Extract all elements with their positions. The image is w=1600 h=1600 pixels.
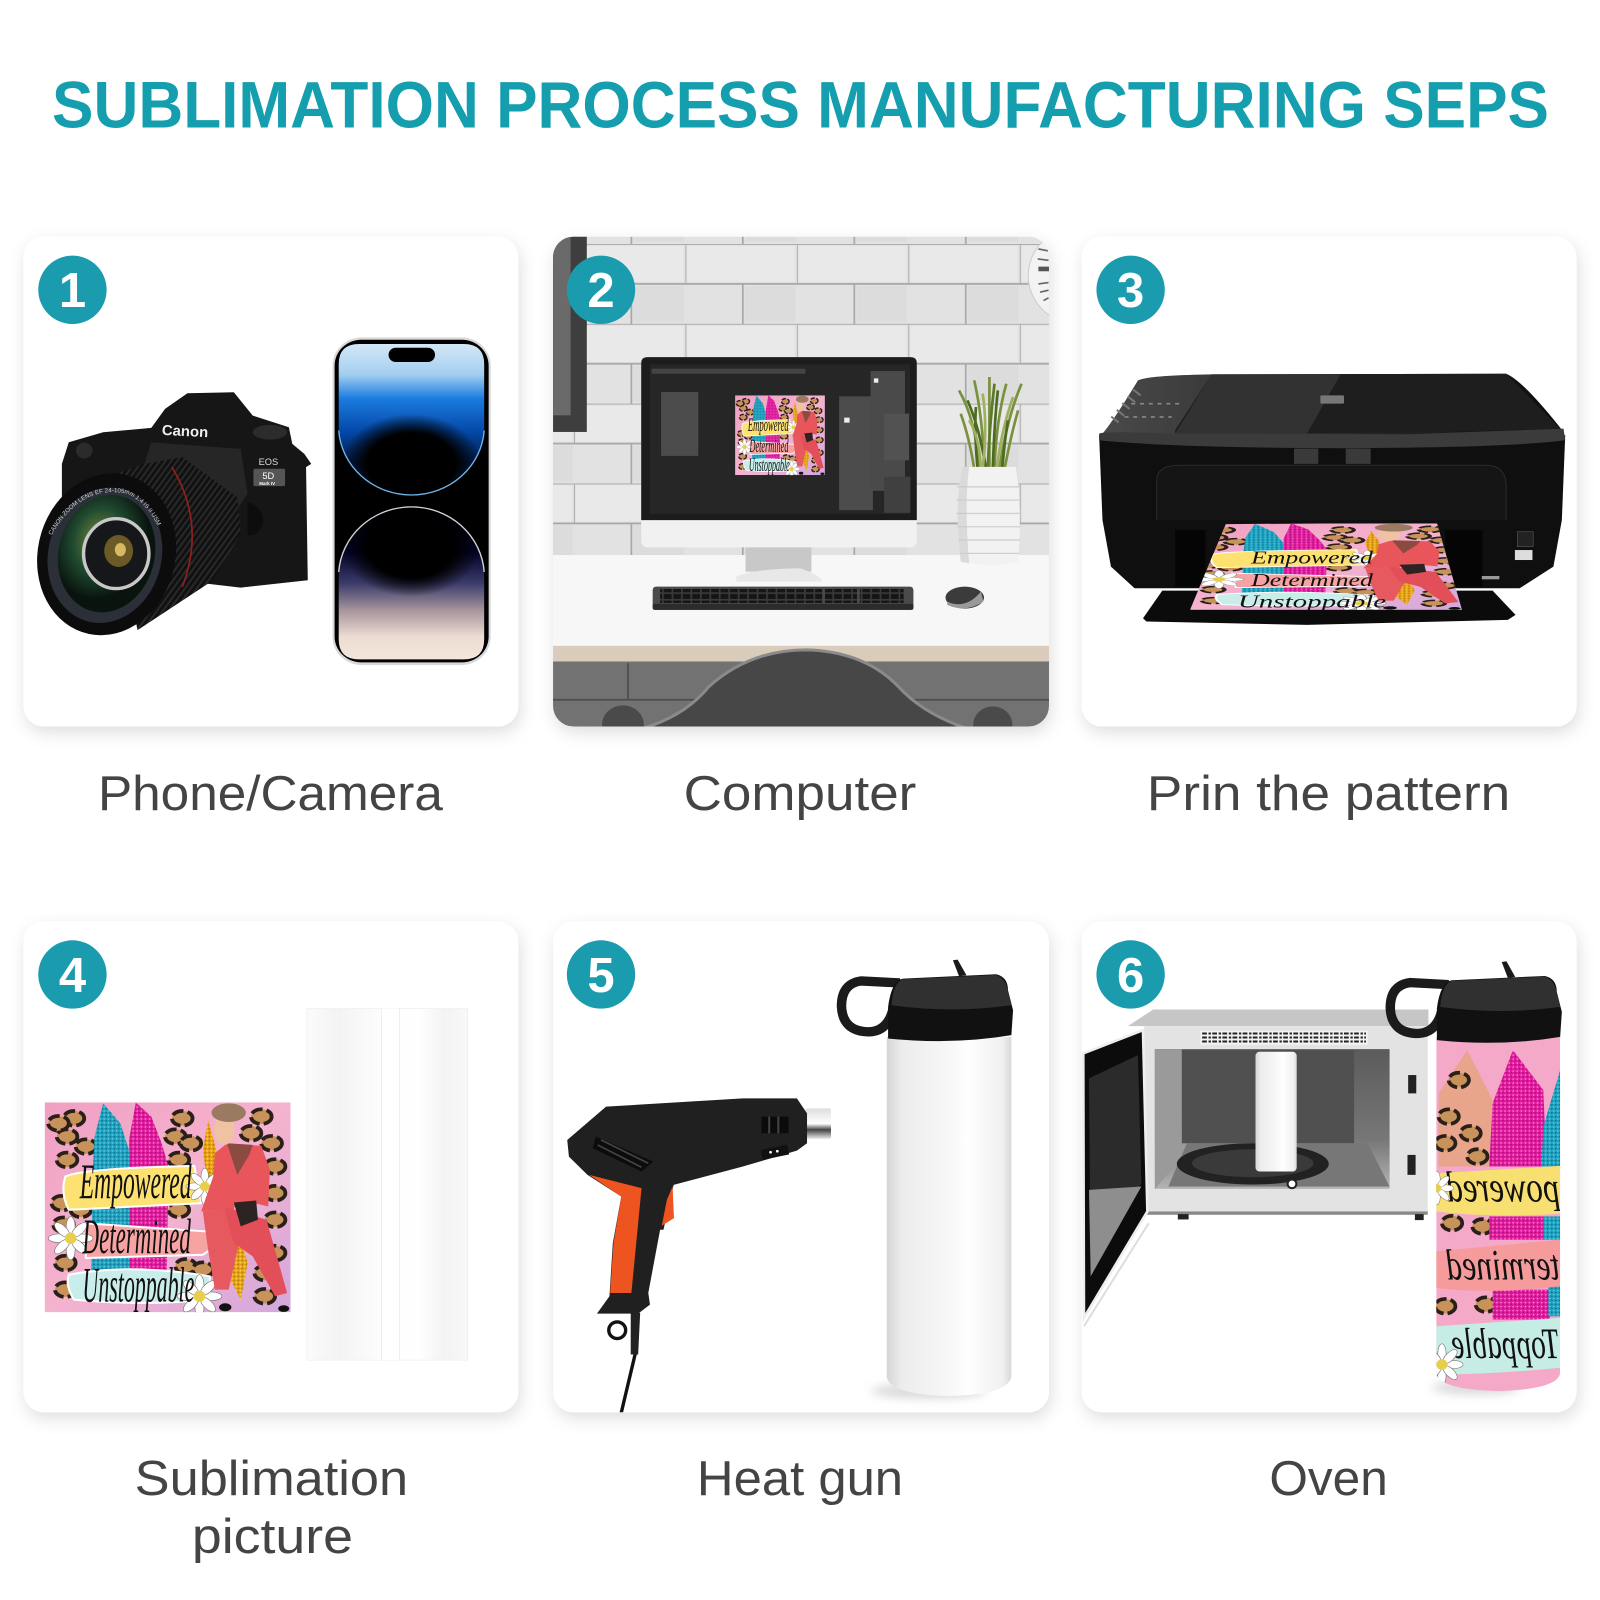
printed artwork on paper: Unstoppable	[1238, 592, 1386, 612]
tumbler inside oven	[1255, 1052, 1297, 1172]
mouse	[946, 587, 984, 609]
badge 6	[1096, 940, 1165, 1009]
on-screen artwork: Empowered	[747, 415, 789, 436]
icon: camera: 5D	[262, 471, 275, 481]
sublimation artwork: Empowered	[79, 1154, 192, 1209]
badge 4	[38, 940, 107, 1009]
badge 3: 3	[1117, 264, 1144, 318]
badge 1: 1	[59, 264, 86, 318]
card 3	[1082, 237, 1577, 727]
on-screen artwork	[735, 395, 825, 477]
icon: camera	[37, 392, 312, 636]
label: sublimation picture: Sublimation	[135, 1452, 408, 1506]
panel 3: print the pattern	[1082, 237, 1577, 821]
badge 2	[567, 256, 635, 324]
camera model: EOS	[259, 457, 278, 467]
label: heat gun: Heat gun	[697, 1452, 903, 1506]
keyboard	[653, 587, 913, 610]
icon: white water bottle	[841, 960, 1013, 1398]
shrink wrap film	[307, 1009, 468, 1360]
monitor	[641, 357, 917, 582]
panel 4: sublimation picture	[23, 921, 518, 1564]
lens inscription: CANON ZOOM LENS EF 24-105mm 1:4 IS II USM	[48, 488, 162, 534]
panel 6: oven	[1082, 921, 1577, 1506]
badge 5	[567, 940, 635, 1009]
badge 5: 5	[587, 949, 615, 1003]
panel 2: computer	[550, 236, 1056, 820]
label: oven: Oven	[1269, 1452, 1388, 1506]
icon: smartphone	[333, 337, 491, 665]
icon: printer	[1099, 374, 1565, 625]
icon: camera: Mark IV	[259, 481, 275, 486]
icon: printed water bottle	[1390, 961, 1562, 1394]
badge 6: 6	[1117, 949, 1144, 1003]
card 6	[1082, 921, 1577, 1412]
label: print the pattern: Prin the pattern	[1147, 767, 1510, 821]
card 4	[23, 921, 518, 1412]
badge 3	[1096, 256, 1165, 324]
sublimation artwork: Unstoppable	[83, 1257, 194, 1312]
card 5	[553, 921, 1049, 1412]
icon: printed water bottle: Toppable	[1451, 1320, 1559, 1368]
badge 2: 2	[587, 264, 615, 318]
sublimation artwork: Determined	[82, 1209, 191, 1264]
on-screen artwork: Unstoppable	[749, 455, 790, 476]
on-screen artwork: Determined	[749, 436, 789, 457]
label: computer: Computer	[684, 767, 916, 821]
badge 1	[38, 256, 107, 324]
icon: microwave oven	[1083, 1010, 1428, 1326]
badge 4: 4	[59, 949, 86, 1003]
printed artwork on paper	[1190, 523, 1462, 612]
label: sublimation picture	[135, 1452, 408, 1564]
sublimation artwork	[45, 1102, 291, 1318]
icon: printed water bottle: termined	[1446, 1242, 1559, 1290]
panel 5: heat gun	[553, 921, 1049, 1506]
card 1	[23, 237, 518, 727]
printed artwork on paper: Determined	[1250, 571, 1373, 591]
icon: printed water bottle: powered	[1446, 1164, 1562, 1211]
printed artwork on paper: Empowered	[1250, 548, 1373, 568]
label: phone/camera: Phone/Camera	[98, 767, 444, 821]
potted plant	[956, 377, 1022, 565]
label: sublimation picture: picture	[192, 1510, 353, 1564]
camera brand: Canon	[161, 423, 209, 441]
card 2	[553, 237, 1049, 727]
desk scene	[553, 236, 1049, 726]
icon: heat gun	[567, 1098, 831, 1413]
panel 1: phone and camera	[20, 243, 526, 821]
